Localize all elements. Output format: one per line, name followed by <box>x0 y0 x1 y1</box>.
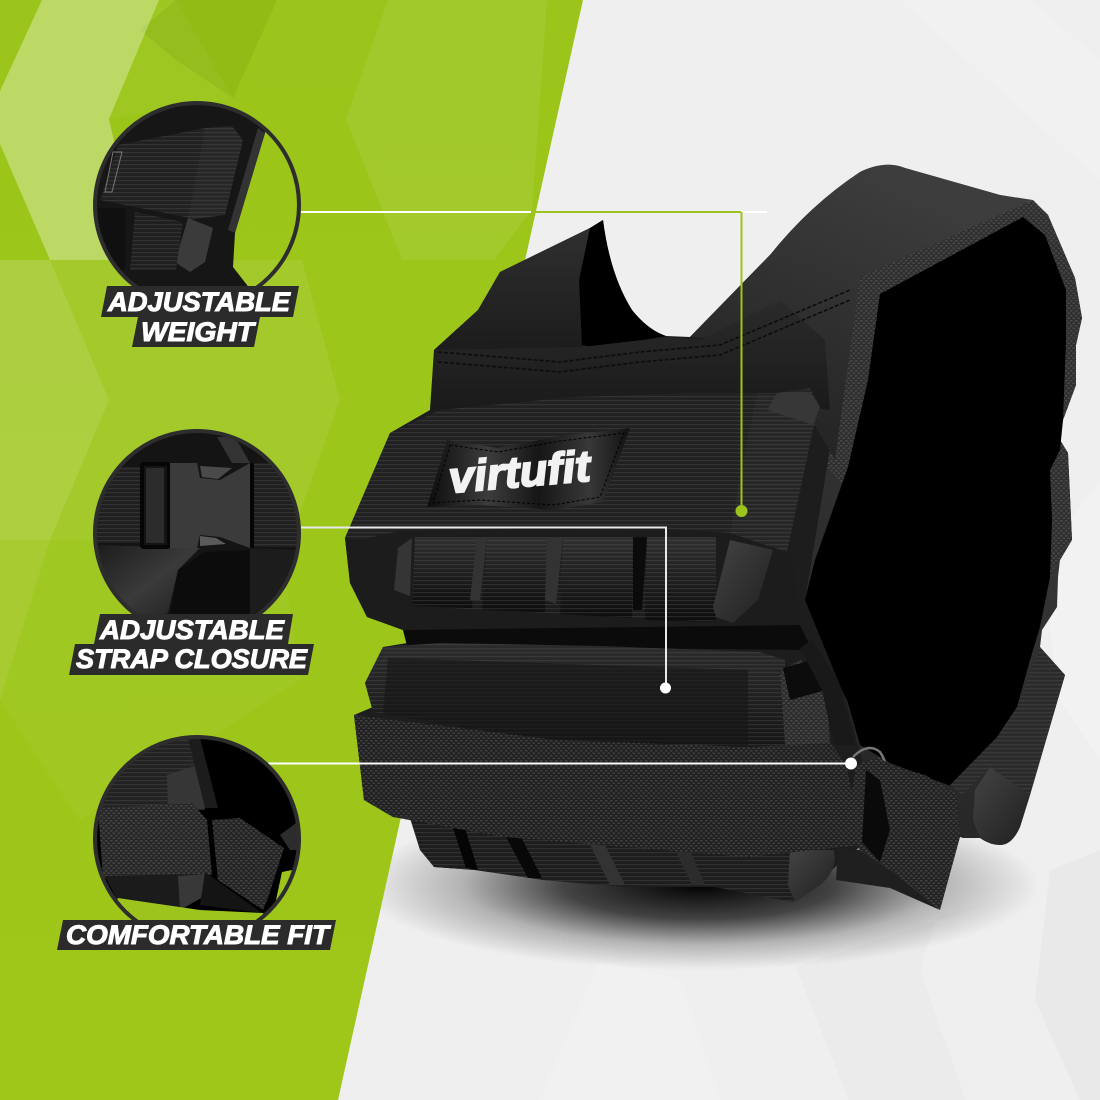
buckle body <box>170 463 250 548</box>
panel: adjustable strap closure <box>69 428 314 675</box>
mesh rim <box>827 200 1082 627</box>
end of upper weight <box>713 540 773 623</box>
inset circle: comfortable fit <box>93 735 301 920</box>
D ring <box>853 748 886 775</box>
lower pocket <box>365 640 855 748</box>
top front flap <box>345 393 757 540</box>
callout lines <box>268 212 857 770</box>
inset circle: adjustable weight <box>93 101 301 286</box>
logo text: virtufit <box>447 442 595 503</box>
front body <box>345 220 862 902</box>
weight sleeve 3 <box>560 537 633 618</box>
left shoulder <box>434 228 590 350</box>
inner neck shadow <box>579 220 666 348</box>
label: strap closure: STRAP CLOSURE <box>76 644 308 674</box>
weight sleeve 2 <box>482 537 547 612</box>
weight sleeve 1 <box>412 537 477 608</box>
label: strap closure: ADJUSTABLE <box>99 615 285 645</box>
green diagonal panel with hexagon facets <box>0 0 583 1100</box>
chest band with stitch rows <box>430 290 850 410</box>
small flap <box>212 818 284 910</box>
inset circle: strap closure <box>93 429 301 614</box>
bottom weights <box>409 815 835 902</box>
floor shadow under vest <box>360 800 1040 970</box>
weight pockets panel <box>345 530 812 650</box>
strap flap with buckle <box>846 757 960 910</box>
label: strap closure <box>69 614 314 675</box>
right side strap <box>950 647 1065 795</box>
label: adjustable weight: WEIGHT <box>141 317 257 347</box>
label: adjustable weight <box>101 286 299 347</box>
label: adjustable weight: ADJUSTABLE <box>107 287 291 317</box>
black interior of back panel <box>805 217 1066 787</box>
callout 1 line <box>301 212 767 517</box>
underside shade <box>836 848 940 910</box>
weight sleeve 4 <box>645 537 716 622</box>
waist strap <box>354 715 862 857</box>
weight vest product <box>345 165 1082 910</box>
label: comfortable fit: COMFORTABLE FIT <box>66 920 332 950</box>
buckle ladder <box>142 464 169 547</box>
right end weight <box>973 767 1030 845</box>
logo patch <box>427 428 630 510</box>
callout 2 line <box>301 528 671 694</box>
callout 3 line <box>268 758 857 770</box>
panel: adjustable weight <box>90 100 299 347</box>
rolled weight sleeve upper right <box>730 388 820 552</box>
vest back shoulder panel <box>690 165 1082 845</box>
shoulder fabric <box>690 165 1033 460</box>
panel: comfortable fit <box>57 735 336 960</box>
